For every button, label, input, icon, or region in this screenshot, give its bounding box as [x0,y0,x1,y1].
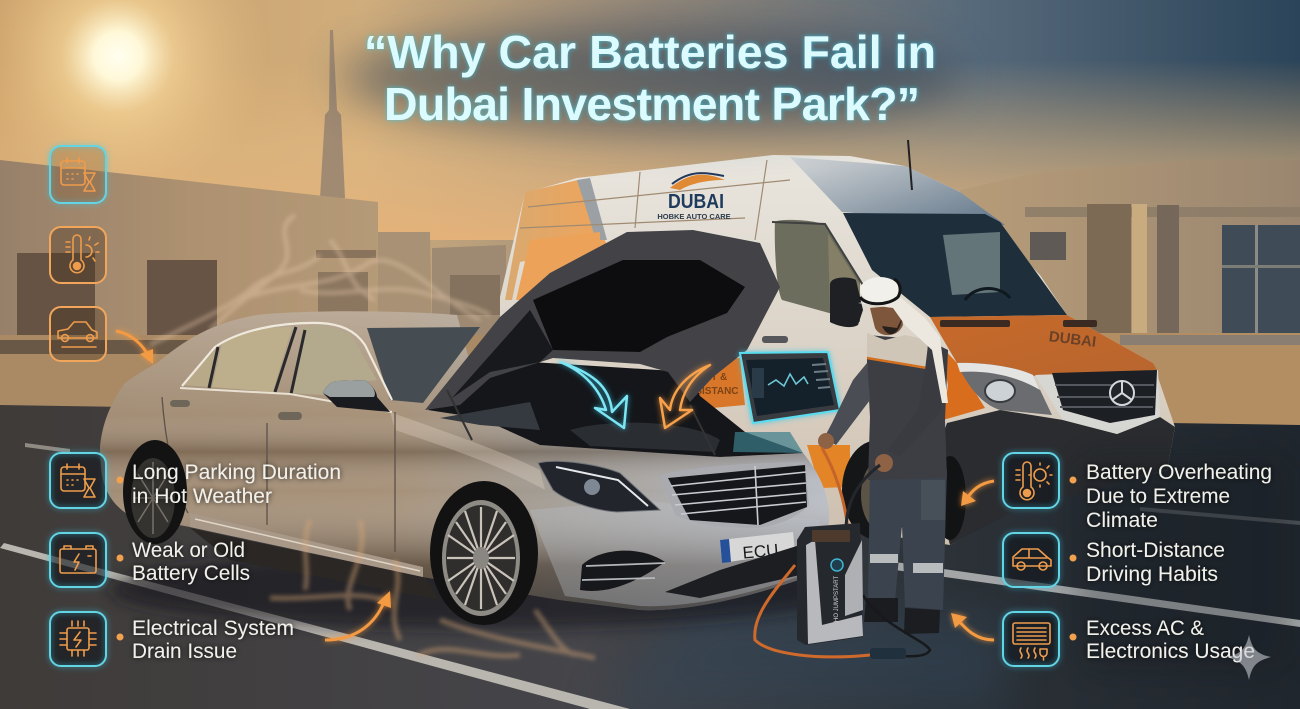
van rear orange panel [505,180,607,300]
front wheel [430,481,538,625]
van handle [762,336,788,343]
right item: excess ac [1003,612,1255,666]
bullet [116,476,124,484]
charger case [797,523,863,645]
van logo [657,173,731,221]
label: Due to Extreme [1086,485,1230,508]
heading: “Why Car Batteries Fail in [364,26,936,78]
van logo: DUBAI [668,191,724,213]
van side window [775,220,860,322]
icon: car [1003,533,1059,587]
car door lines and handles [162,397,395,552]
technician legs [868,470,947,610]
background: sunset sky [0,0,1300,340]
label: Weak or Old [132,539,245,562]
silver sedan [100,230,850,628]
car shadow [110,552,850,628]
icon: chip [50,612,106,666]
top left icon: car [50,307,106,361]
right item: short distance [1003,533,1225,587]
car grille [660,462,809,528]
van body [500,155,1175,545]
left item: electrical drain [50,612,294,666]
car mirror [323,380,390,412]
technician torso [867,335,948,480]
bullet [1070,476,1076,484]
label: Climate [1086,509,1158,532]
background: right building [960,160,1300,335]
open hood [425,230,780,410]
van wheel [842,440,914,540]
arrow: right upper orange [961,481,994,506]
background: sand and ground [0,333,1300,425]
technician arms [824,363,870,445]
sparkle watermark [1227,635,1271,680]
portable jump starter: HO JUMPSTART [834,576,840,622]
title dark halo [340,26,960,130]
car sill [190,513,423,577]
icon: calendar with hourglass [50,453,106,508]
background: tall tower [320,30,345,198]
heading: Dubai Investment Park?” [384,78,920,130]
van lower door orange [665,358,745,415]
van headlight [957,363,1052,415]
number plate ECU: ECU [742,540,779,563]
background: left warehouse [0,160,506,345]
label: Excess AC & [1086,617,1204,640]
engine bay [428,360,803,457]
car body [100,311,829,610]
right item: overheating [1003,453,1272,532]
icon: battery [50,533,106,587]
technician head and keffiyeh [870,305,903,335]
service van: DUBAI [1048,328,1097,351]
label: Short-Distance [1086,539,1225,562]
left item: long parking [50,453,341,508]
service van: ASSISTANC [681,386,739,397]
icon: air conditioner and plug [1003,612,1059,666]
label: Electronics Usage [1086,640,1255,663]
van antenna [908,140,912,190]
van windshield [843,213,1067,317]
van orange hood [930,315,1158,376]
icon: thermometer and sun [1003,453,1059,508]
car lower intake [580,551,665,591]
van logo: HOBKE AUTO CARE [657,212,731,221]
portable jump starter [755,448,930,659]
arrow: top left orange [116,331,153,364]
bullet [116,554,124,562]
service van [500,140,1175,545]
charger cables [755,565,870,657]
background: asphalt road [0,405,1300,709]
label: Long Parking Duration [132,461,341,484]
diagnostic tablet [740,352,840,423]
car headlight [538,461,660,512]
van mirror [830,278,863,327]
bullet [1070,634,1076,640]
label: Battery Overheating [1086,461,1272,484]
arrow: bottom left orange [325,591,391,640]
van door lines [520,160,790,240]
left item: weak battery [50,533,250,587]
car windows [182,347,218,387]
van grille [1035,370,1160,434]
label: Drain Issue [132,640,237,663]
heading [364,26,936,130]
top left icon: calendar with hourglass [50,146,106,203]
rear wheel [123,440,187,544]
label: in Hot Weather [132,485,272,508]
service van: ART & [697,372,727,383]
smoke behind car [150,215,490,345]
bullet [1070,554,1076,562]
hood strut [447,390,715,455]
number plate ECU [720,532,795,563]
label: Battery Cells [132,562,250,585]
technician [818,277,948,634]
van bumper [930,410,1175,545]
top left icon: thermometer and sun [50,227,106,283]
label: Driving Habits [1086,563,1218,586]
arrow: right lower orange [951,613,994,640]
soft dark backing behind right labels [1075,455,1290,670]
arrow: cyan into engine bay [560,362,627,428]
bullet [116,634,124,640]
label: Electrical System [132,617,294,640]
smoke under car [270,520,595,658]
arrow: orange into engine bay [660,365,710,428]
van roof front [790,157,1005,225]
